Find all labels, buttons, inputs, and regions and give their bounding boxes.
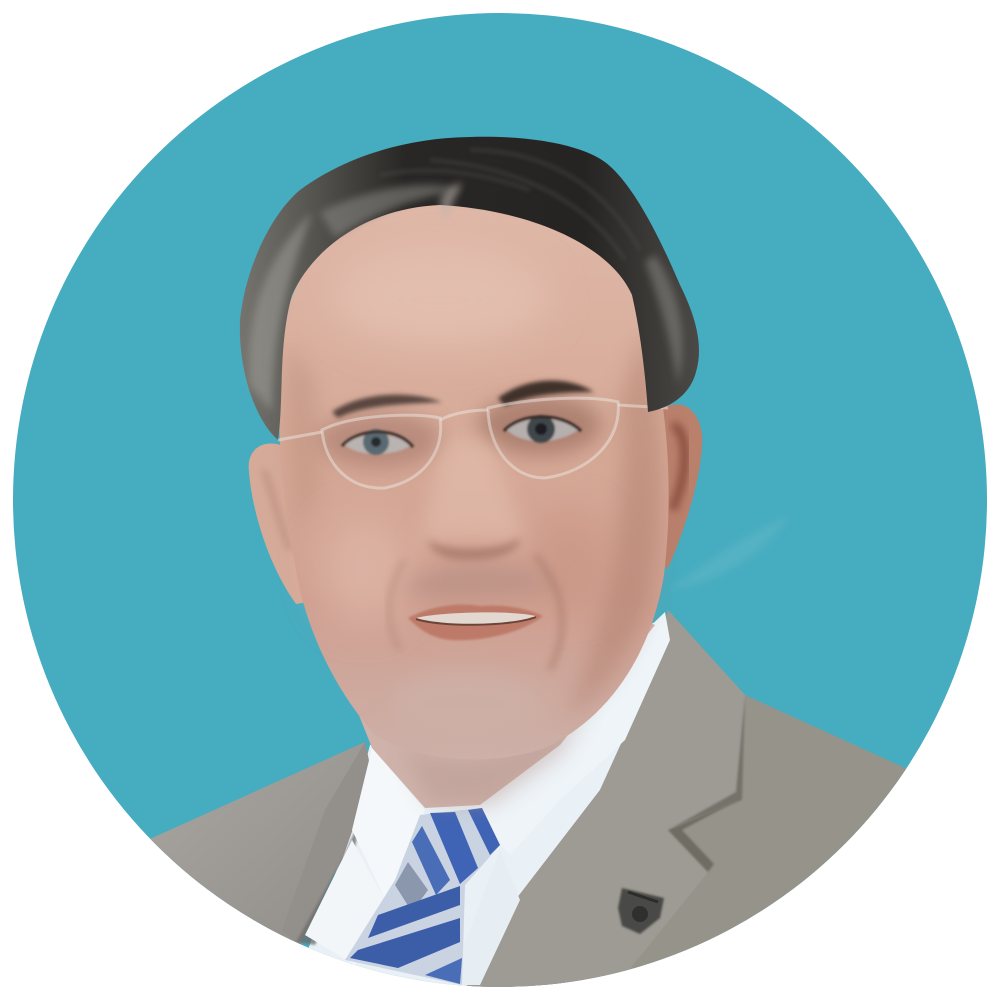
necktie: [345, 808, 500, 985]
right ear: [663, 404, 702, 568]
right cheek tone: [550, 528, 590, 582]
shirt shadow beside left lapel: [296, 832, 358, 946]
glasses: [278, 398, 668, 488]
grey streak left: [249, 212, 312, 412]
right eye socket: [478, 395, 602, 455]
left ear: [248, 444, 304, 604]
chin tone: [436, 682, 498, 694]
faint light streak: [682, 522, 782, 586]
hairline: [440, 182, 462, 222]
left temple shadow: [278, 359, 316, 496]
right eye: [504, 415, 581, 443]
neck: [359, 624, 655, 808]
clipped figure: [150, 136, 906, 987]
grey streak right: [645, 255, 683, 385]
hair: [240, 137, 699, 440]
shirt: [308, 622, 654, 986]
right cheek shadow: [572, 346, 666, 708]
suit left side: [150, 742, 369, 944]
suit right side: [467, 610, 906, 987]
face: [278, 200, 669, 759]
mouth: [408, 604, 543, 640]
left eyebrow: [332, 395, 442, 418]
nose: [420, 440, 525, 560]
left cheek highlight: [321, 522, 408, 620]
lapel pin: [618, 888, 664, 934]
left eye: [342, 429, 413, 455]
right eyebrow: [498, 381, 594, 406]
shirt collar: [305, 612, 670, 985]
forehead highlight: [344, 260, 536, 346]
hair strands: [390, 148, 618, 248]
neck shadow: [418, 723, 586, 814]
nasolabial folds: [389, 560, 405, 650]
upper lip area: [408, 564, 544, 600]
grey streak centre: [320, 185, 462, 238]
left eye socket: [318, 412, 442, 468]
